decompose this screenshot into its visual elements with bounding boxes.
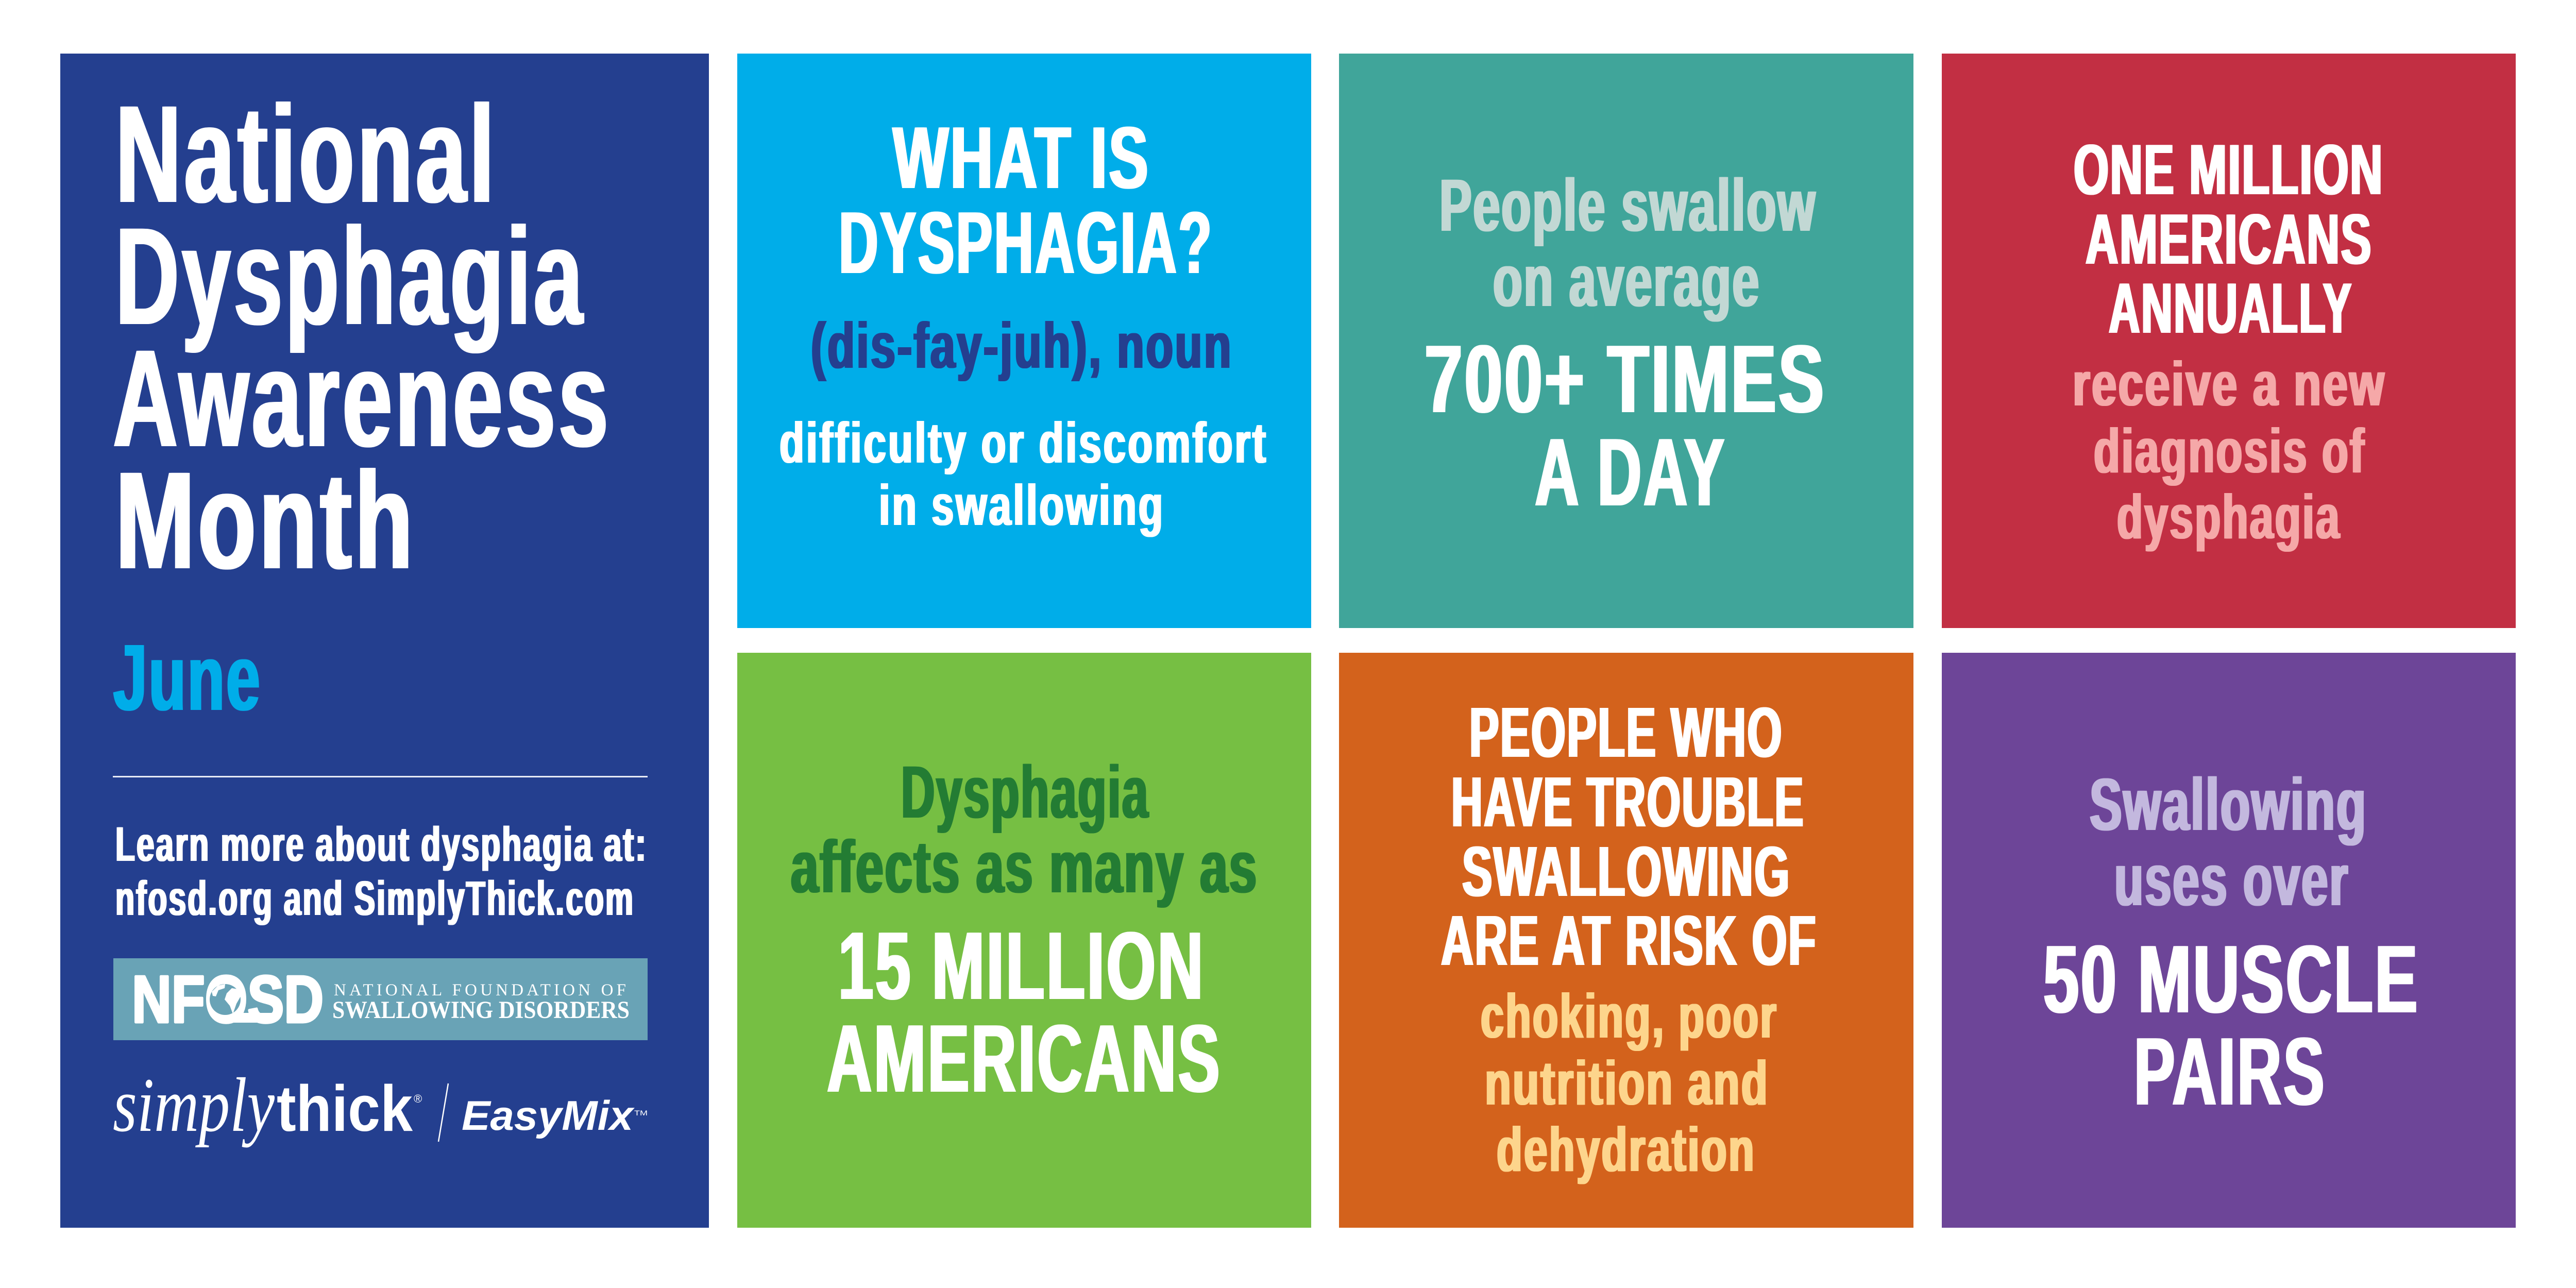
definition: in swallowing [879, 473, 1165, 537]
risks list [1481, 981, 1778, 1184]
month: June: June [113, 624, 262, 730]
slash divider [438, 1083, 448, 1142]
lead-in text: People swallow [1439, 164, 1817, 247]
panel: title sidebar [60, 54, 709, 1228]
lead-in text: affects as many as [791, 825, 1258, 908]
panel: what is dysphagia [737, 54, 1311, 628]
statistic: ANNUALLY [2109, 268, 2353, 348]
lead-in text: Dysphagia [901, 751, 1149, 834]
panel: swallow frequency [1339, 54, 1913, 628]
title: National [115, 77, 497, 232]
statistic [1425, 325, 1826, 526]
description [2073, 349, 2386, 552]
description: receive a new [2073, 349, 2386, 419]
logo name line 1: NATIONAL FOUNDATION OF [334, 981, 626, 999]
tile background [737, 54, 1311, 628]
statistic [2043, 925, 2419, 1125]
logo: simplythick EasyMix [113, 1062, 648, 1148]
icon: globe in logo [210, 984, 241, 1015]
logo link between O and S [219, 1013, 273, 1023]
tile background [737, 653, 1311, 1228]
lead-in text: uses over [2114, 838, 2349, 921]
logo name line 2: SWALLOWING DISORDERS [332, 996, 630, 1024]
definition: difficulty or discomfort [779, 411, 1268, 475]
heading [839, 109, 1213, 292]
registered mark: ® [414, 1092, 422, 1105]
description: diagnosis of [2094, 416, 2366, 486]
tile background [1339, 653, 1913, 1228]
heading: PEOPLE WHO [1469, 693, 1783, 772]
sidebar background [60, 54, 709, 1228]
heading: WHAT IS [893, 109, 1150, 207]
title [113, 77, 611, 598]
tile background [1942, 653, 2516, 1228]
statistic: 15 MILLION [838, 912, 1205, 1020]
panel: new diagnoses [1942, 54, 2516, 628]
statistic: ONE MILLION [2074, 130, 2384, 210]
lead-in text [1439, 164, 1817, 322]
lead-in text: Swallowing [2090, 763, 2367, 846]
panel: muscle pairs [1942, 653, 2516, 1228]
statistic [827, 912, 1222, 1112]
panel: prevalence [737, 653, 1311, 1228]
lead-in text [2090, 763, 2367, 921]
statistic [2074, 130, 2384, 348]
tile background [1339, 54, 1913, 628]
heading: SWALLOWING [1462, 832, 1791, 911]
thick wordmark: thick [277, 1072, 413, 1145]
lead-in text [791, 751, 1258, 908]
heading: HAVE TROUBLE [1451, 762, 1805, 842]
learn more text: Learn more about dysphagia at: [115, 817, 648, 872]
trademark: TM [634, 1109, 648, 1117]
pronunciation: (dis-fay-juh), noun [811, 310, 1233, 382]
risks list: nutrition and [1485, 1048, 1769, 1118]
simply wordmark: simply [113, 1062, 275, 1148]
statistic: AMERICANS [827, 1005, 1222, 1112]
heading: DYSPHAGIA? [839, 194, 1213, 292]
title: Awareness [113, 321, 611, 476]
risks list: dehydration [1497, 1114, 1756, 1184]
title: Dysphagia [115, 199, 585, 354]
learn more text [115, 817, 648, 926]
lead-in text: on average [1493, 239, 1760, 322]
heading: ARE AT RISK OF [1441, 901, 1817, 980]
divider [113, 776, 648, 777]
risks list: choking, poor [1481, 981, 1778, 1051]
statistic: 700+ TIMES [1425, 325, 1826, 433]
description: dysphagia [2117, 482, 2341, 552]
title: Month [115, 443, 416, 598]
statistic: AMERICANS [2086, 199, 2372, 279]
panel: risks [1339, 653, 1913, 1228]
logo: NFOSD [113, 958, 648, 1040]
statistic: A DAY [1535, 418, 1726, 526]
heading [1441, 693, 1817, 980]
definition [779, 411, 1268, 537]
logo wordmark: NFOSD [132, 962, 324, 1037]
statistic: PAIRS [2134, 1018, 2326, 1125]
tile background [1942, 54, 2516, 628]
logo background [113, 958, 648, 1040]
EasyMix wordmark: EasyMix [462, 1093, 635, 1139]
learn more text: nfosd.org and SimplyThick.com [115, 871, 635, 926]
